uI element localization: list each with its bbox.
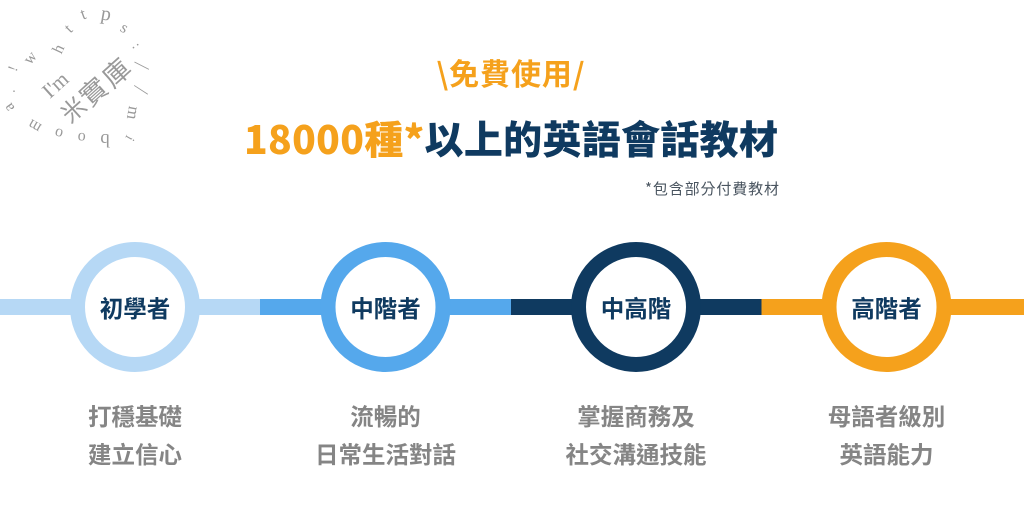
watermark logo: !	[6, 64, 22, 74]
timeline bar	[0, 299, 1024, 315]
watermark logo: h	[50, 42, 68, 56]
level 3: upper intermediate	[566, 250, 706, 470]
watermark logo: i	[122, 132, 136, 143]
level 2: intermediate	[315, 250, 456, 470]
watermark logo: m	[123, 105, 144, 121]
level 3: upper intermediate: 社交溝通技能	[566, 436, 706, 470]
watermark logo: .	[12, 81, 16, 96]
watermark logo: o	[77, 129, 86, 146]
level 4: advanced: 母語者級別	[828, 398, 945, 432]
watermark logo	[0, 2, 154, 150]
level 3: upper intermediate: 掌握商務及	[577, 398, 695, 432]
level 1: beginner	[78, 250, 192, 470]
watermark logo: m	[25, 115, 44, 136]
level 4: advanced: 英語能力	[840, 436, 934, 470]
watermark logo: 庫	[92, 48, 138, 95]
watermark logo: b	[100, 129, 110, 150]
watermark logo: I'm	[37, 67, 73, 103]
watermark logo: 米	[51, 87, 93, 129]
watermark logo: w	[20, 48, 41, 68]
footnote: *包含部分付費教材	[645, 178, 779, 199]
watermark logo: :	[129, 40, 143, 52]
watermark logo: t	[61, 21, 77, 36]
watermark logo: o	[53, 124, 65, 143]
level 4: advanced	[828, 250, 945, 470]
level 2: intermediate: 中階者	[350, 290, 421, 324]
level 4: advanced: 高階者	[851, 290, 922, 324]
watermark logo: s	[117, 19, 131, 37]
level 2: intermediate: 流暢的	[350, 398, 421, 432]
level 3: upper intermediate: 中高階	[601, 290, 671, 324]
level 1: beginner: 初學者	[100, 290, 170, 324]
watermark logo: —	[130, 53, 154, 77]
watermark logo: p	[99, 2, 113, 26]
level 2: intermediate: 日常生活對話	[315, 436, 456, 470]
watermark logo: —	[129, 77, 154, 101]
watermark logo: a	[0, 100, 18, 115]
watermark logo: t	[78, 4, 89, 24]
level 1: beginner: 打穩基礎	[88, 398, 182, 432]
level 1: beginner: 建立信心	[88, 436, 182, 470]
subtitle: \免費使用/	[436, 50, 584, 94]
watermark logo: 實	[69, 67, 115, 114]
main title: 18000種*以上的英語會話教材	[244, 110, 778, 166]
